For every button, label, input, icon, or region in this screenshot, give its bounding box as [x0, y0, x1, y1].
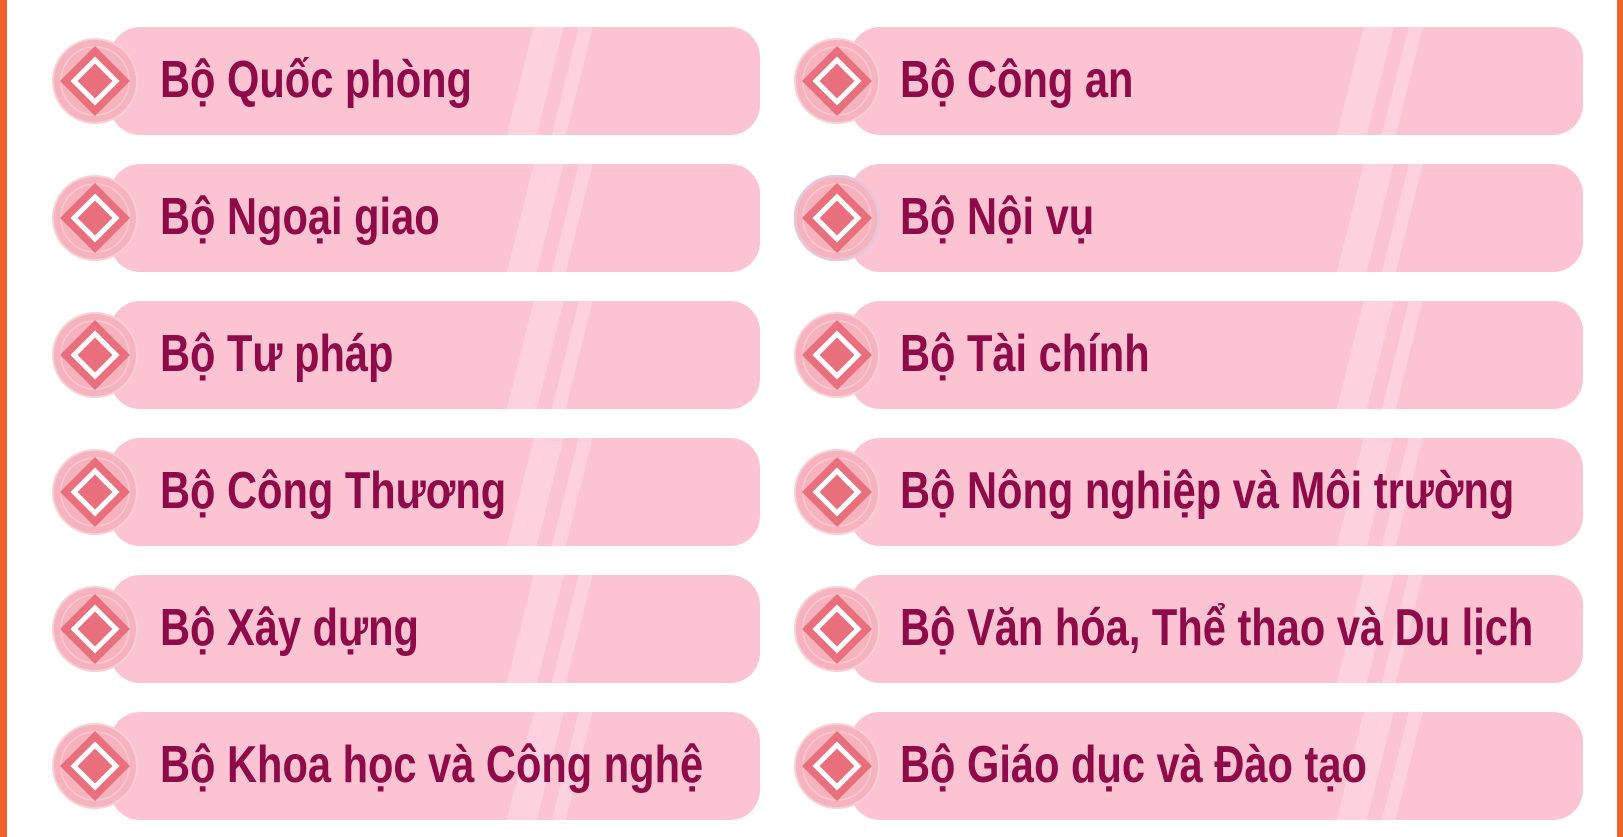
item: Bộ Công an: Bộ Công an — [900, 51, 1133, 109]
item: Bộ Quốc phòng — [52, 27, 760, 135]
icon: diamond badge — [794, 723, 880, 809]
item: Bộ Công an — [794, 27, 1583, 135]
icon: diamond badge — [794, 312, 880, 398]
icon: diamond badge — [52, 38, 138, 124]
item: Bộ Tư pháp: Bộ Tư pháp — [160, 325, 393, 383]
item: Bộ Tài chính — [794, 301, 1583, 409]
icon: diamond badge — [52, 175, 138, 261]
item: Bộ Văn hóa, Thể thao và Du lịch — [794, 575, 1583, 683]
icon: diamond badge — [794, 175, 880, 261]
item: Bộ Xây dựng: Bộ Xây dựng — [160, 599, 419, 657]
item: Bộ Nông nghiệp và Môi trường — [794, 438, 1583, 546]
item: Bộ Khoa học và Công nghệ: Bộ Khoa học và Công nghệ — [160, 736, 703, 794]
icon: diamond badge — [52, 449, 138, 535]
icon: diamond badge — [52, 586, 138, 672]
item: Bộ Giáo dục và Đào tạo: Bộ Giáo dục và Đào tạo — [900, 736, 1367, 794]
item: Bộ Nội vụ: Bộ Nội vụ — [900, 188, 1094, 246]
icon: diamond badge — [52, 723, 138, 809]
icon: diamond badge — [794, 38, 880, 124]
item: Bộ Xây dựng — [52, 575, 760, 683]
item: Bộ Nông nghiệp và Môi trường: Bộ Nông nghiệp và Môi trường — [900, 462, 1514, 520]
item: Bộ Nội vụ — [794, 164, 1583, 272]
icon: diamond badge — [794, 586, 880, 672]
item: Bộ Quốc phòng: Bộ Quốc phòng — [160, 51, 472, 109]
item: Bộ Công Thương — [52, 438, 760, 546]
item: Bộ Công Thương: Bộ Công Thương — [160, 462, 506, 520]
item: Bộ Ngoại giao — [52, 164, 760, 272]
icon: diamond badge — [52, 312, 138, 398]
icon: diamond badge — [794, 449, 880, 535]
item: Bộ Văn hóa, Thể thao và Du lịch: Bộ Văn hóa, Thể thao và Du lịch — [900, 599, 1533, 657]
item: Bộ Giáo dục và Đào tạo — [794, 712, 1583, 820]
item: Bộ Tư pháp — [52, 301, 760, 409]
item: Bộ Tài chính: Bộ Tài chính — [900, 325, 1150, 383]
item: Bộ Ngoại giao: Bộ Ngoại giao — [160, 188, 440, 246]
item: Bộ Khoa học và Công nghệ — [52, 712, 760, 820]
